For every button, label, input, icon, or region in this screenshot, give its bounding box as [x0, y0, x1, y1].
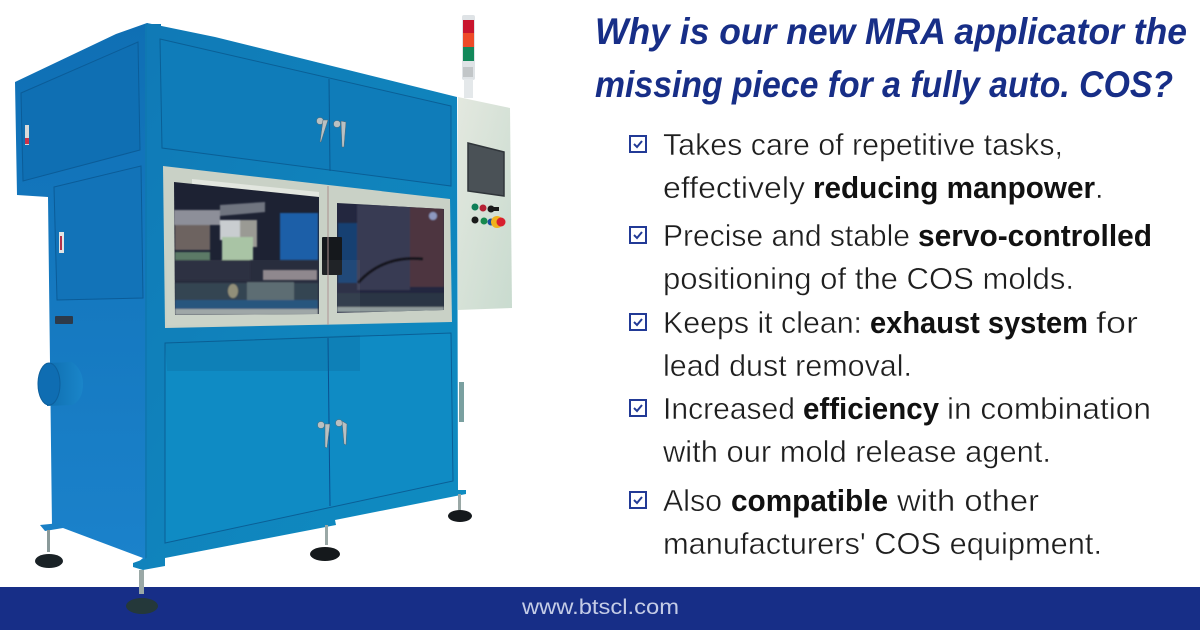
item 1: .: [1095, 171, 1103, 205]
item 1: effectively: [663, 171, 806, 205]
signal tower: [462, 15, 475, 98]
item 1: [630, 128, 1103, 205]
item 4: Increased: [663, 392, 795, 426]
door handles: [316, 118, 347, 448]
checkbox list: [630, 128, 1152, 561]
footer url: www.btscl.com: [521, 596, 679, 619]
right window view: [335, 200, 447, 315]
machine side cabinet: [15, 23, 162, 565]
item 2: servo-controlled: [918, 219, 1152, 253]
item 2: positioning of the COS molds.: [663, 262, 1074, 296]
machine control panel: [458, 97, 512, 310]
machine window: [163, 166, 452, 328]
item 5: manufacturers' COS equipment.: [663, 527, 1102, 561]
footer bar: [0, 587, 1200, 630]
item 1: reducing manpower: [813, 171, 1095, 205]
item 5: Also: [663, 484, 722, 518]
item 5: with other: [896, 484, 1039, 518]
item 4: [630, 392, 1151, 469]
title: [595, 11, 1187, 105]
leveling feet: [35, 494, 472, 614]
machine front body: [133, 23, 466, 570]
machine illustration: [15, 15, 512, 614]
item 3: lead dust removal.: [663, 349, 912, 383]
side fitting: [459, 382, 464, 422]
item 5: [630, 484, 1102, 561]
item 3: exhaust system: [870, 306, 1088, 340]
item 3: for: [1096, 306, 1138, 340]
item 1: Takes care of repetitive tasks,: [663, 128, 1063, 162]
buttons: [472, 204, 506, 228]
item 2: Precise and stable: [663, 219, 910, 253]
item 4: with our mold release agent.: [662, 435, 1051, 469]
item 5: compatible: [731, 484, 888, 518]
item 3: Keeps it clean:: [663, 306, 862, 340]
left window view: [174, 182, 319, 315]
title: Why is our new MRA applicator the: [595, 11, 1187, 52]
item 2: [630, 219, 1152, 296]
item 3: [630, 306, 1138, 383]
item 4: efficiency: [803, 392, 939, 426]
door latch: [322, 237, 342, 275]
item 4: in combination: [947, 392, 1151, 426]
touch screen: [468, 143, 504, 196]
exhaust pipe: [38, 362, 83, 406]
